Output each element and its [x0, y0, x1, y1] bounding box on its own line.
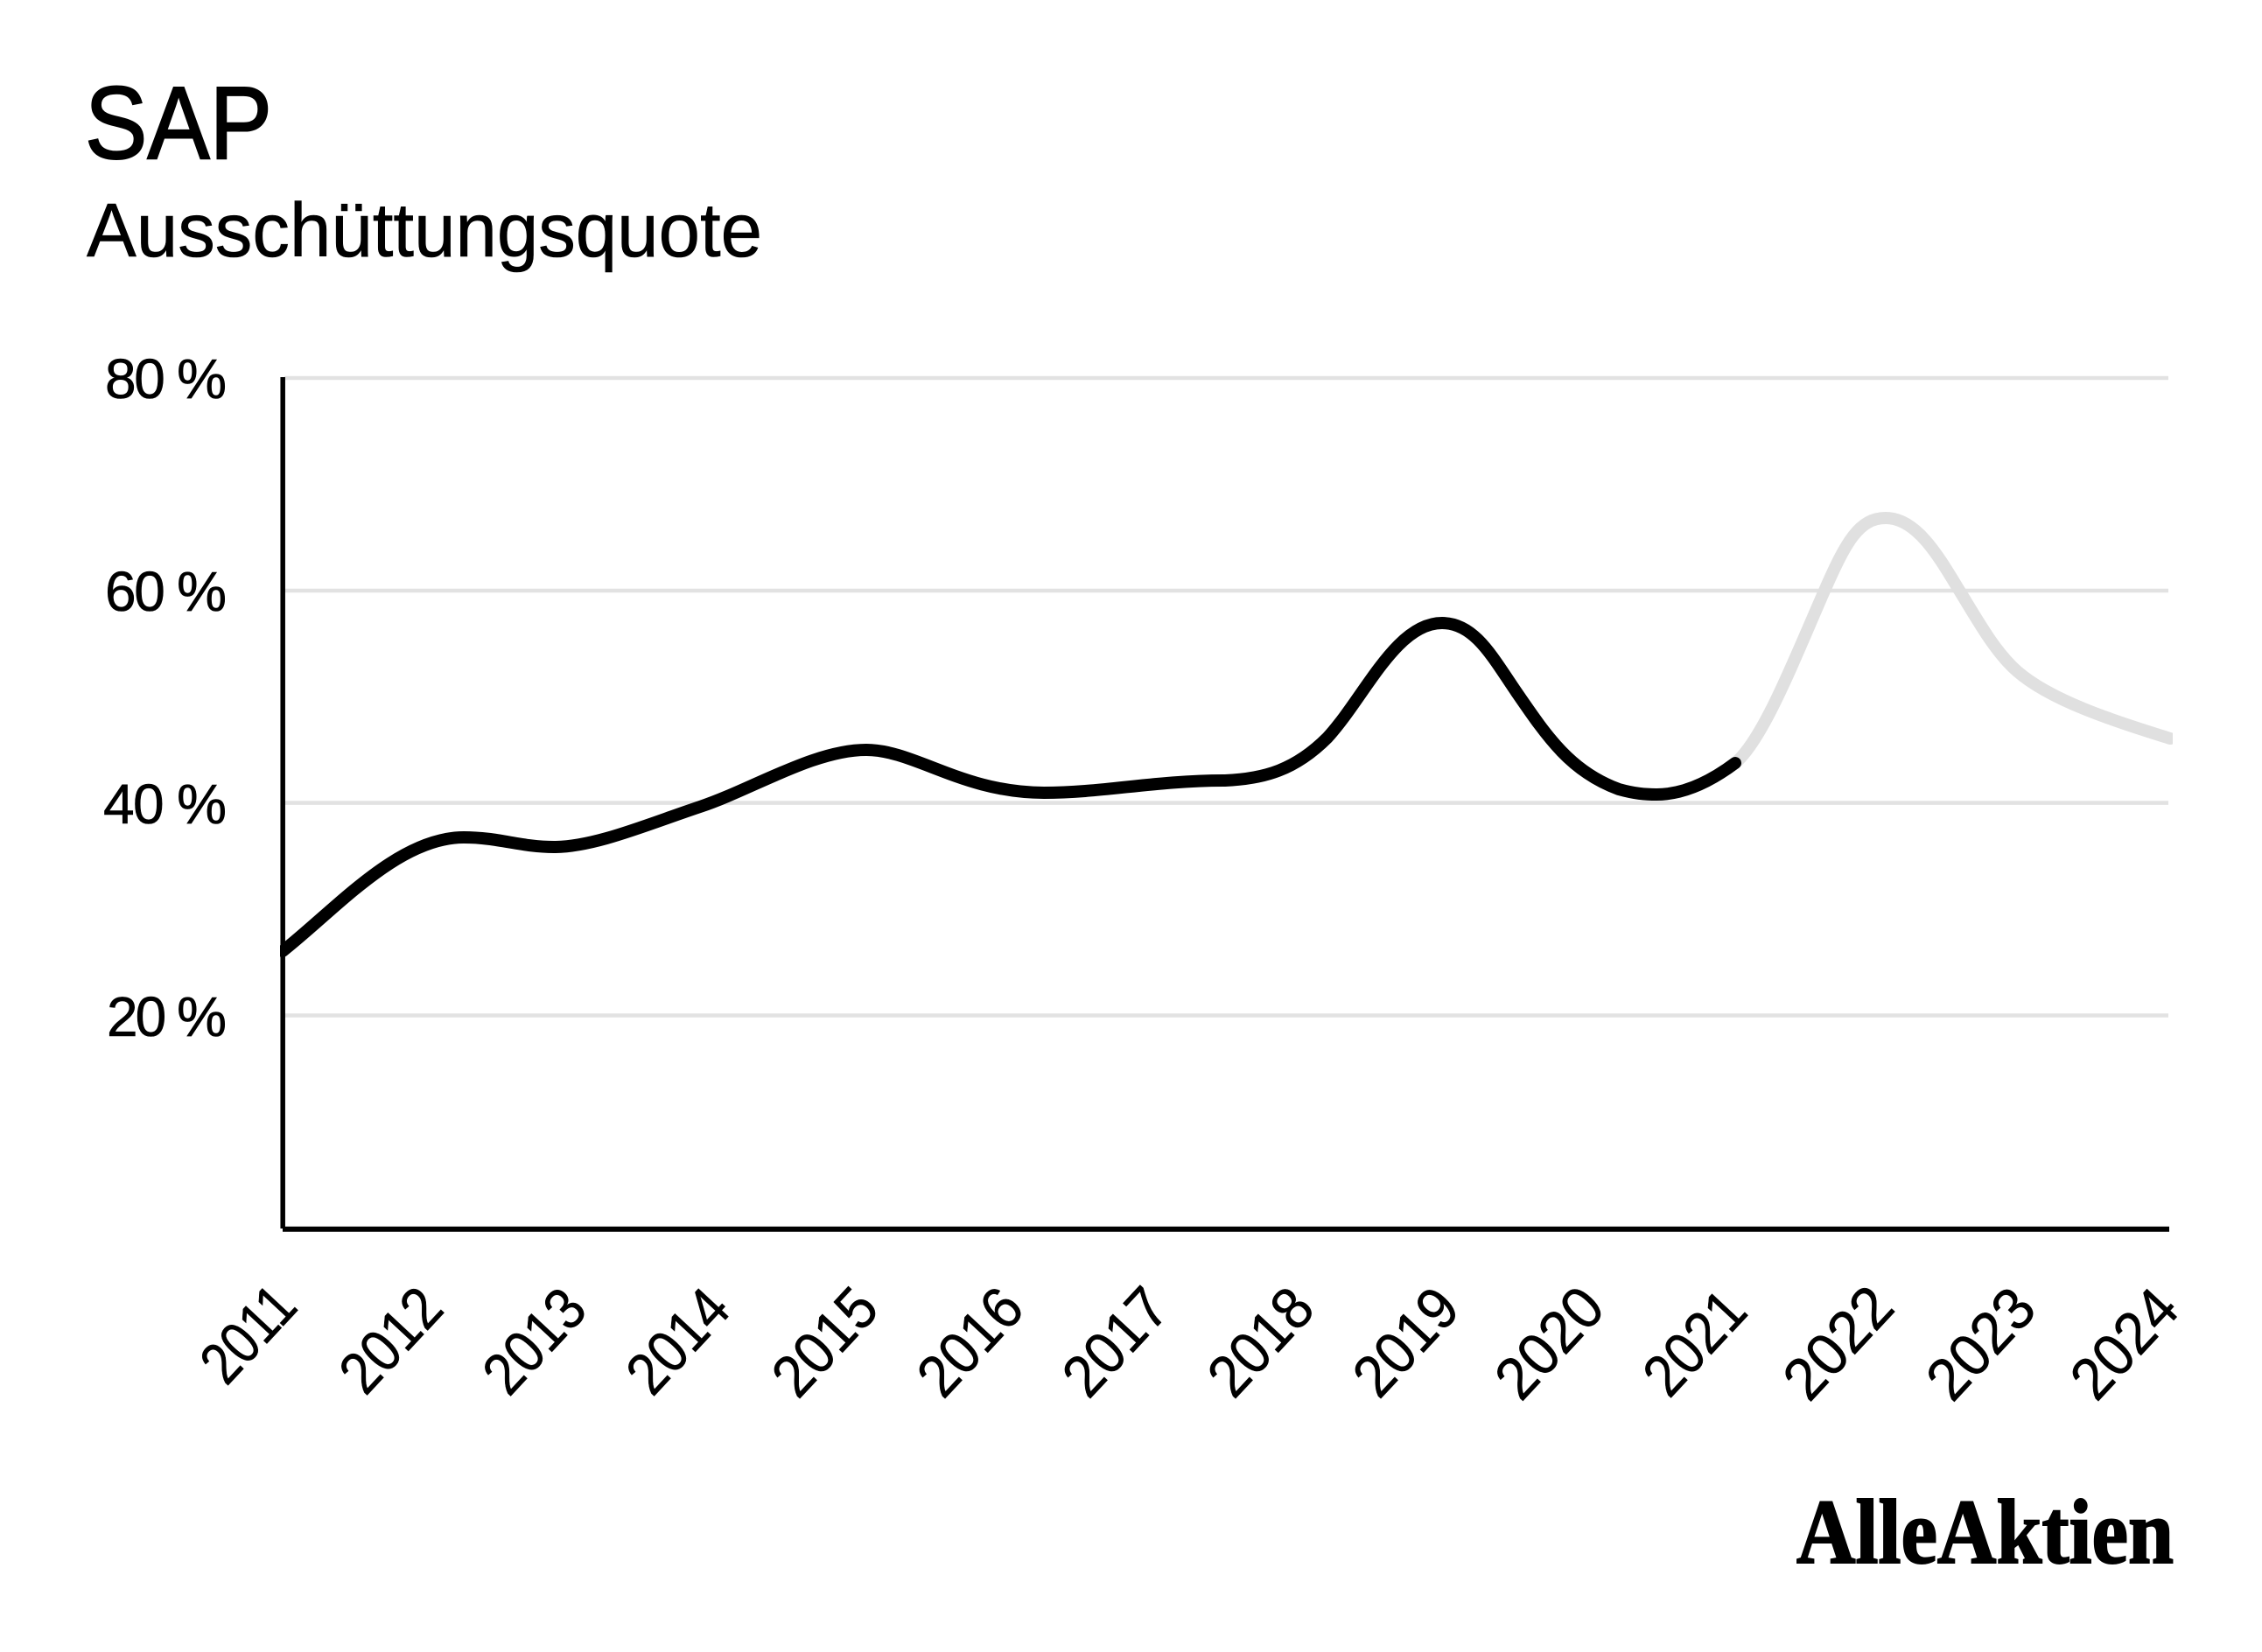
forecast line 2021-2024	[1735, 518, 2170, 763]
label: 2014: 2014	[613, 1275, 743, 1407]
label: 2019: 2019	[1340, 1275, 1472, 1410]
label: 2011: 2011	[187, 1272, 309, 1396]
grid lines	[284, 378, 2168, 1015]
historical line 2011-2021	[283, 623, 1735, 951]
label: 60 %: 60 %	[105, 560, 227, 623]
label: 2020: 2020	[1481, 1274, 1617, 1412]
label: 2023: 2023	[1913, 1275, 2048, 1413]
y-axis labels	[103, 347, 227, 1048]
y axis	[280, 377, 285, 1228]
title: SAP	[85, 66, 272, 181]
label: 80 %: 80 %	[105, 347, 227, 410]
subtitle: Ausschüttungsquote	[87, 188, 762, 273]
label: 2012: 2012	[326, 1274, 456, 1406]
label: 2018: 2018	[1194, 1275, 1327, 1410]
logo: AlleAktien: AlleAktien	[1796, 1480, 2174, 1583]
label: 2017: 2017	[1049, 1275, 1181, 1410]
x axis	[283, 1227, 2169, 1232]
label: 2016: 2016	[904, 1275, 1036, 1410]
label: 2013: 2013	[470, 1275, 599, 1407]
label: 40 %: 40 %	[103, 773, 227, 836]
label: 2022: 2022	[1770, 1273, 1907, 1412]
label: 2021: 2021	[1630, 1277, 1760, 1409]
label: 2024: 2024	[2057, 1275, 2191, 1412]
label: 2015: 2015	[759, 1275, 891, 1410]
x-axis year labels	[187, 1272, 2191, 1413]
label: 20 %: 20 %	[107, 985, 227, 1048]
